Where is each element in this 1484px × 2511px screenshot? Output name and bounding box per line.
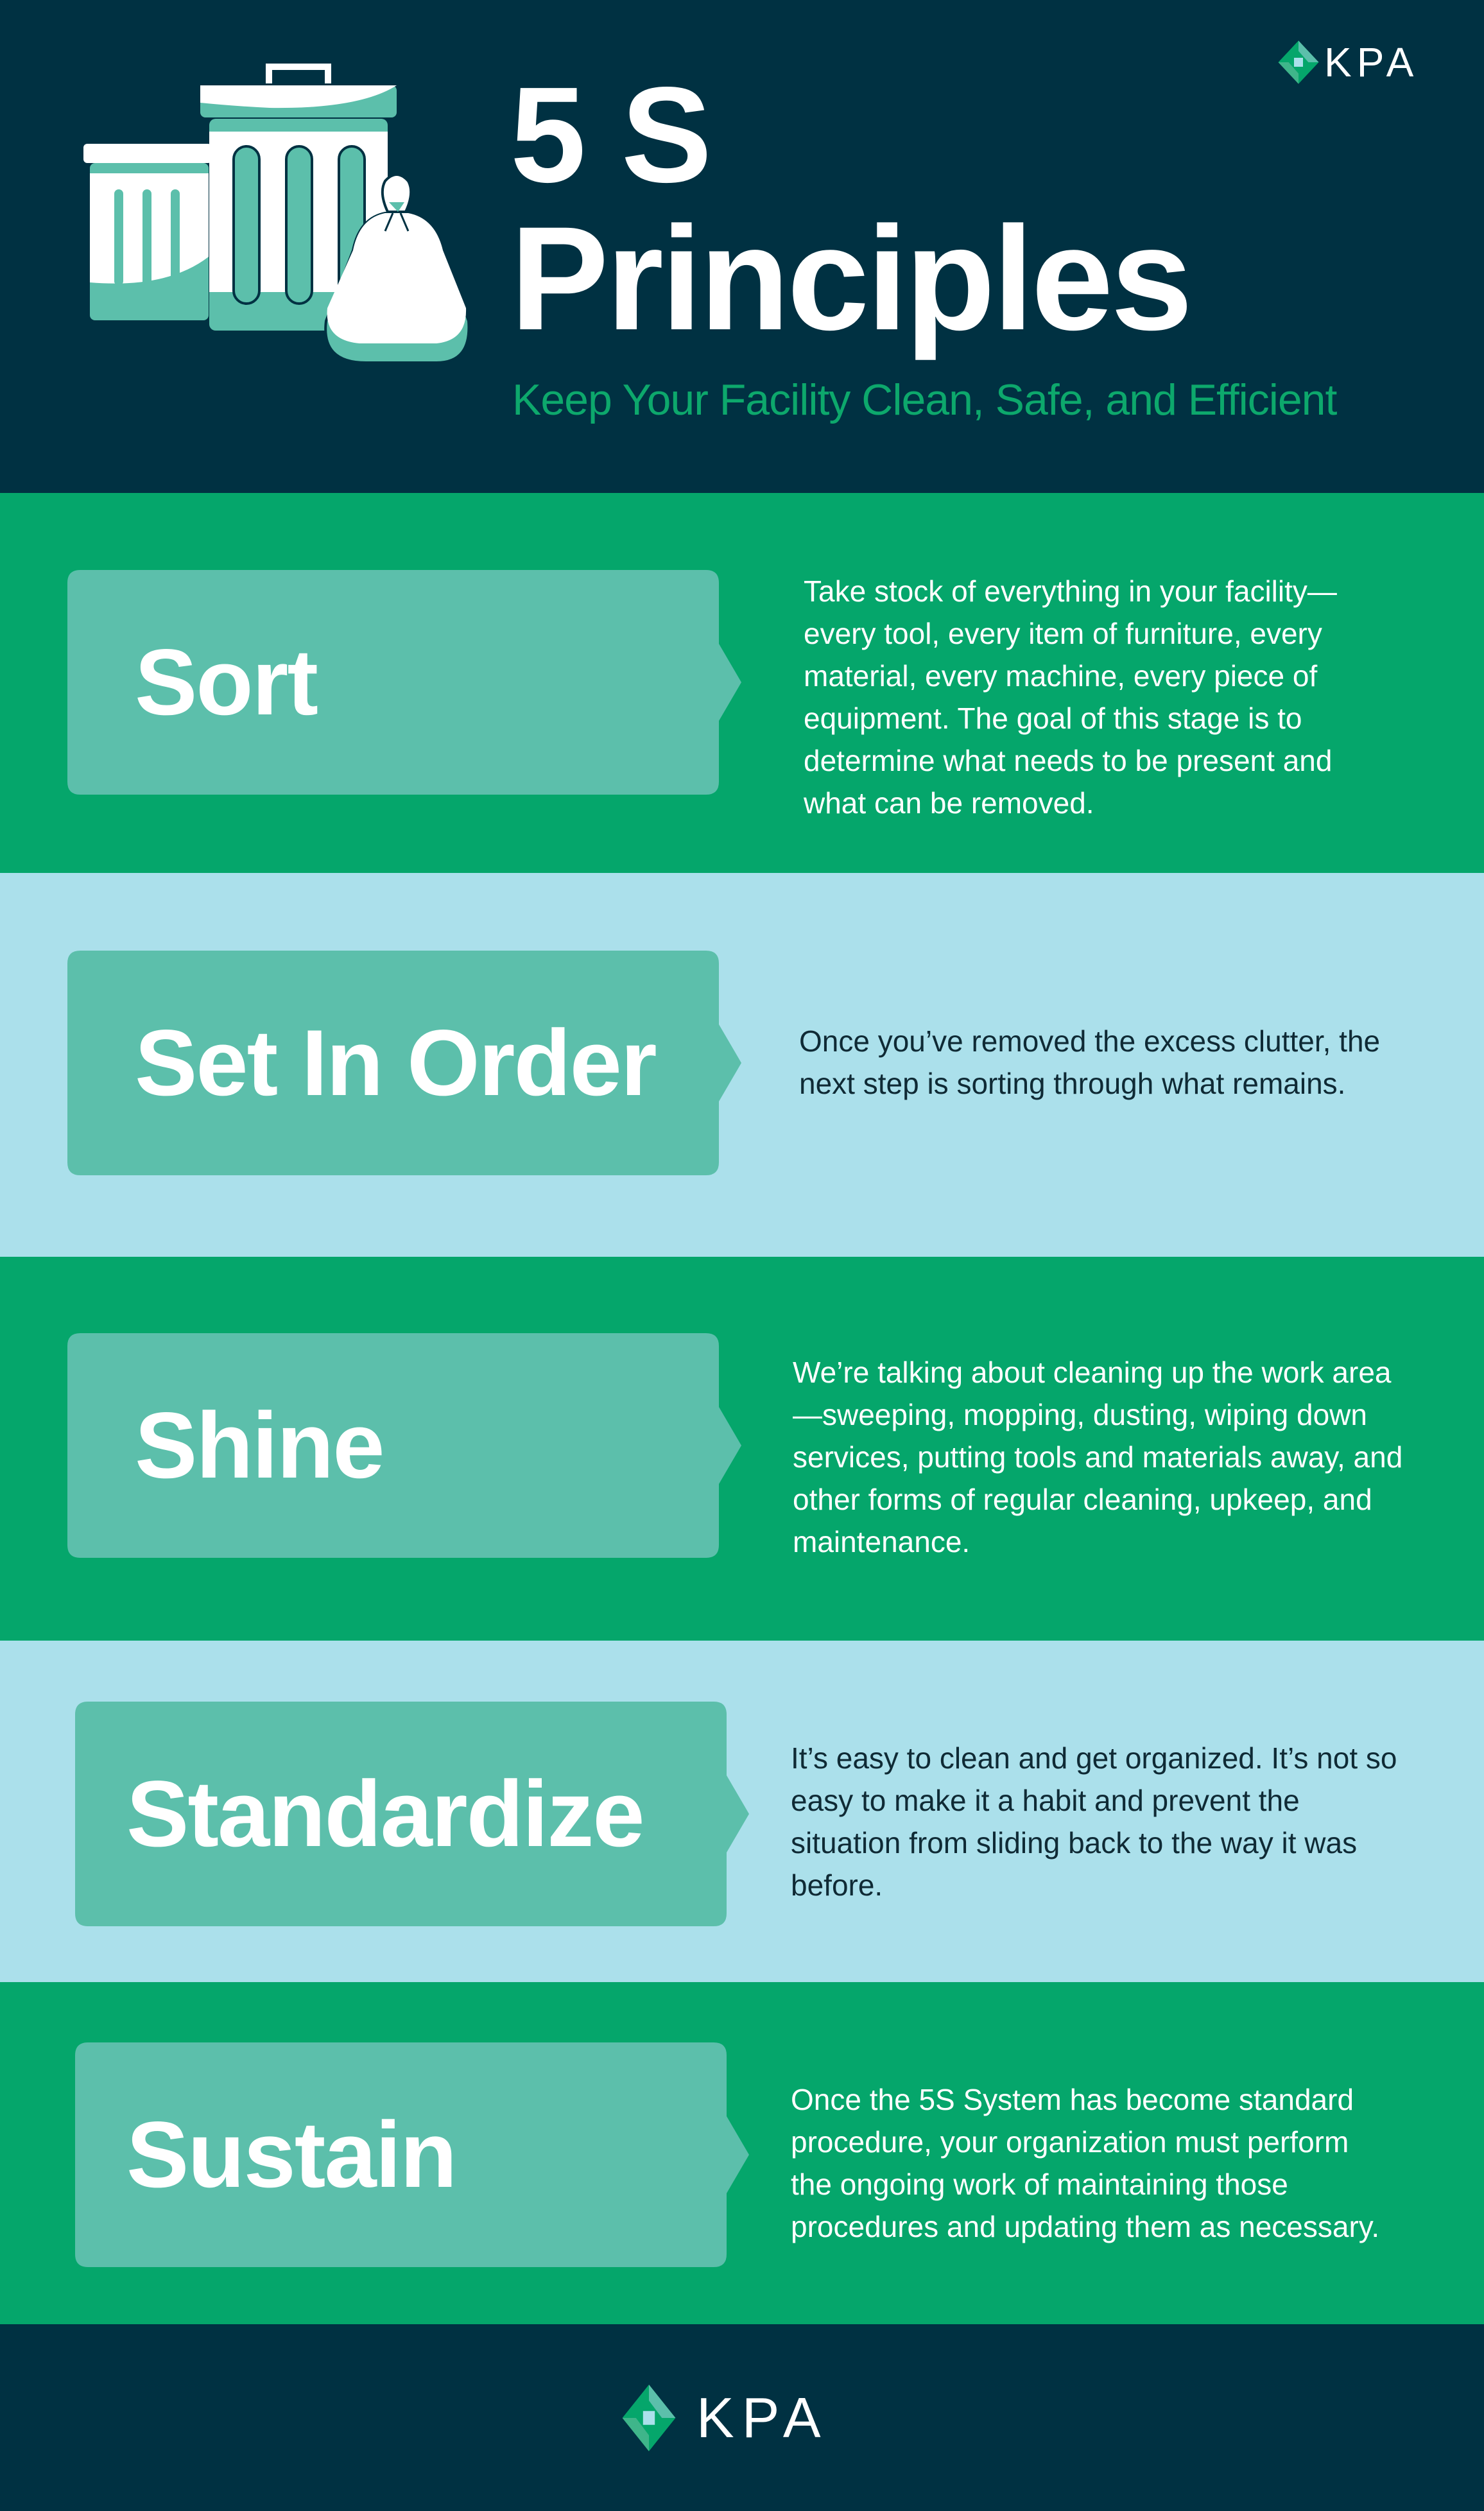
- card: Standardize: Standardize: [126, 1761, 644, 1866]
- text: Sort description: material, every machine, every piece of: [804, 659, 1317, 693]
- text: Shine description: —sweeping, mopping, dusting, wiping down: [793, 1398, 1367, 1431]
- card: Set In Order: Set In Order: [135, 1010, 656, 1115]
- card: Standardize: [75, 1702, 749, 1926]
- header: [0, 0, 1484, 493]
- text: Sustain description: procedures and updating them as necessary.: [791, 2210, 1379, 2243]
- text: Sort description: equipment. The goal of this stage is to: [804, 702, 1302, 735]
- text: Sort description: [804, 574, 1337, 820]
- text: Sustain description: Once the 5S System has become standard: [791, 2083, 1354, 2116]
- panel: Sustain: [0, 1982, 1484, 2324]
- text: Sustain description: [791, 2083, 1379, 2243]
- title: 5 S: [510, 58, 711, 211]
- text: Shine description: We’re talking about cleaning up the work area: [793, 1356, 1392, 1389]
- panel: Set In Order: [0, 873, 1484, 1257]
- panel: Shine: [0, 1257, 1484, 1641]
- text: Shine description: maintenance.: [793, 1525, 970, 1558]
- text: Sort description: Take stock of everything in your facility—: [804, 574, 1337, 608]
- text: Shine description: other forms of regular cleaning, upkeep, and: [793, 1483, 1372, 1516]
- text: Standardize description: [791, 1741, 1397, 1902]
- text: Set In Order description: next step is sorting through what remains.: [799, 1067, 1345, 1100]
- logo: KPA footer: [623, 2385, 829, 2451]
- card: Shine: Shine: [135, 1393, 384, 1497]
- text: Set In Order description: Once you’ve removed the excess clutter, the: [799, 1024, 1380, 1058]
- text: Standardize description: before.: [791, 1868, 883, 1902]
- text: Sort description: every tool, every item of furniture, every: [804, 617, 1322, 650]
- text: Standardize description: It’s easy to clean and get organized. It’s not so: [791, 1741, 1397, 1775]
- text: Standardize description: easy to make it a habit and prevent the: [791, 1784, 1300, 1817]
- title: Principles: [510, 196, 1190, 361]
- card: Sort: Sort: [135, 630, 317, 734]
- text: Set In Order description: [799, 1024, 1380, 1100]
- text: Sort description: what can be removed.: [804, 786, 1094, 820]
- card: Sustain: Sustain: [126, 2102, 456, 2207]
- logo: KPA footer: KPA: [696, 2386, 829, 2449]
- text: Sustain description: the ongoing work of maintaining those: [791, 2168, 1288, 2201]
- subtitle: Keep Your Facility Clean, Safe, and Efficient: [512, 375, 1336, 424]
- title: [510, 58, 1190, 361]
- card: Sort: [67, 570, 741, 795]
- card: Sustain: [75, 2042, 749, 2267]
- logo: KPA top: [1279, 39, 1419, 85]
- icon: trash cans: [83, 64, 467, 361]
- bag: [325, 213, 469, 363]
- panel: Standardize: [0, 1641, 1484, 1982]
- text: Sustain description: procedure, your organization must perform: [791, 2125, 1349, 2159]
- card: Shine: [67, 1333, 741, 1558]
- card: Set In Order: [67, 951, 741, 1175]
- text: Standardize description: situation from sliding back to the way it was: [791, 1826, 1357, 1860]
- text: Sort description: determine what needs to be present and: [804, 744, 1332, 777]
- logo: KPA top: KPA: [1324, 39, 1419, 85]
- footer: [0, 2324, 1484, 2511]
- panel: Sort: [0, 493, 1484, 873]
- text: Shine description: services, putting tools and materials away, and: [793, 1440, 1402, 1474]
- text: Shine description: [793, 1356, 1402, 1558]
